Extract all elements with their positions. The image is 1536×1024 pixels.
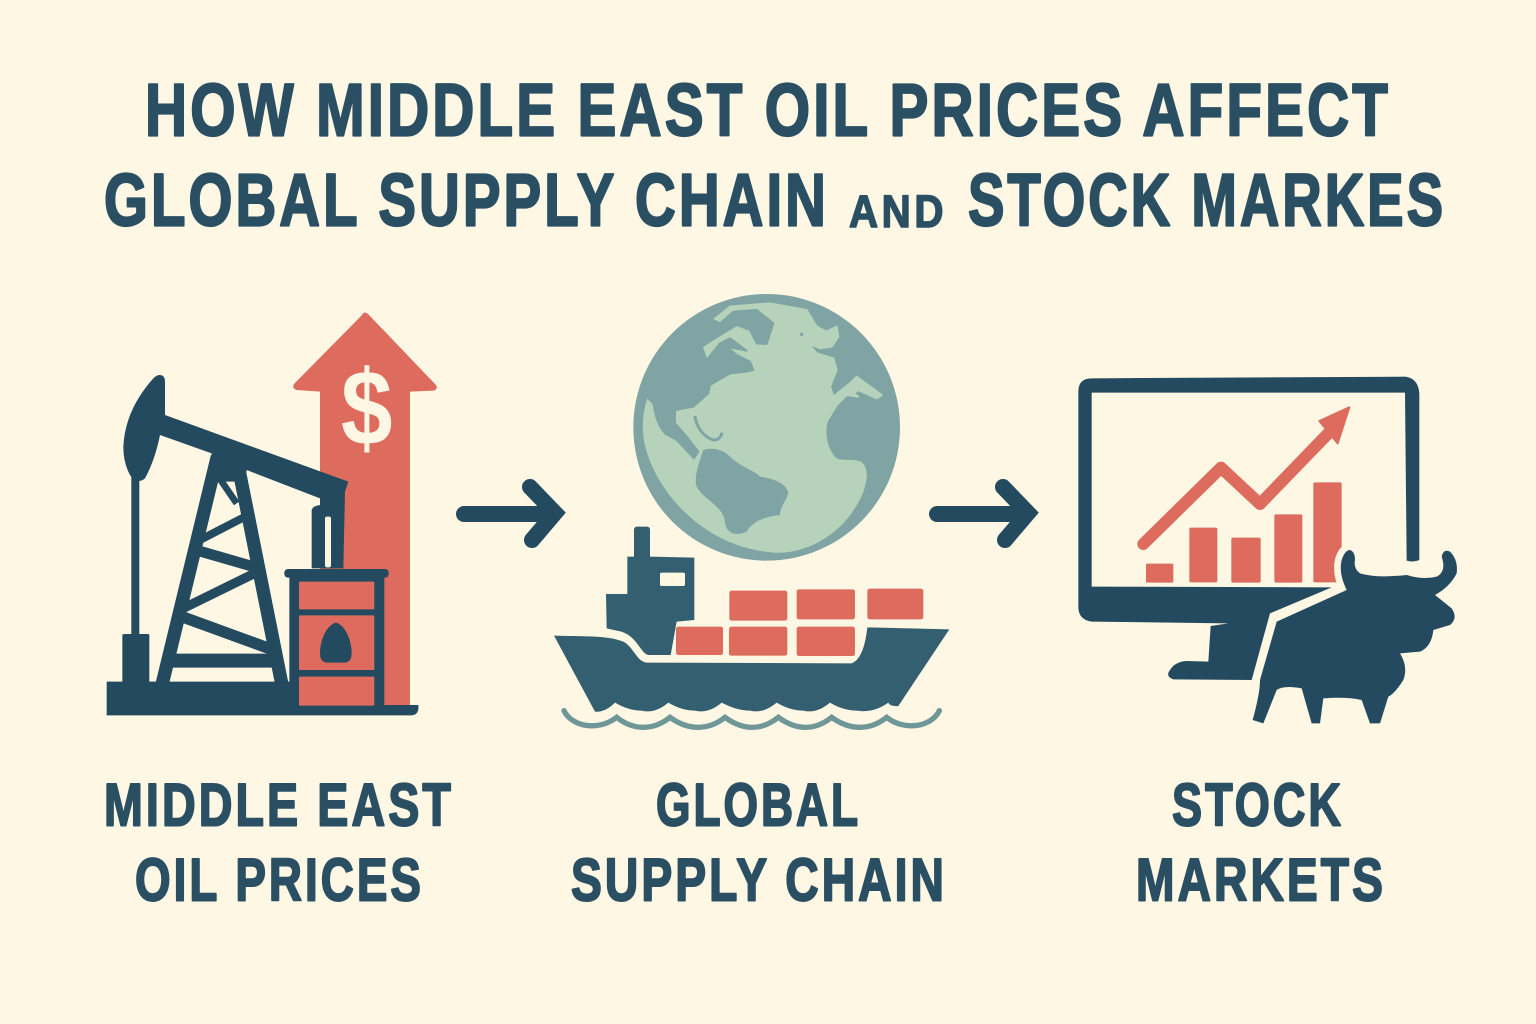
label: middle east oil prices: OIL PRICES bbox=[135, 846, 424, 914]
icon: pipe slot bbox=[325, 517, 331, 567]
panel: supply chain icon bbox=[554, 294, 949, 727]
label: stock markets: STOCK bbox=[1172, 772, 1344, 838]
label: global supply chain bbox=[571, 772, 947, 914]
icon: oil barrel bbox=[284, 569, 389, 707]
title bbox=[104, 68, 1446, 242]
panel: stock markets icon bbox=[1078, 377, 1457, 723]
title: GLOBAL SUPPLY CHAIN bbox=[104, 158, 829, 242]
label: global supply chain: SUPPLY CHAIN bbox=[571, 846, 947, 914]
label: middle east oil prices: MIDDLE EAST bbox=[104, 772, 454, 838]
icon: bull bbox=[1253, 550, 1457, 723]
icon: cargo ship bbox=[554, 527, 949, 712]
bar chart bbox=[1146, 482, 1342, 583]
icon: globe bbox=[633, 294, 900, 561]
icon: red up arrow with dollar sign bbox=[293, 313, 437, 708]
label: global supply chain: GLOBAL bbox=[656, 772, 861, 838]
icon: red up arrow with dollar sign: $ bbox=[341, 348, 392, 468]
icon: computer monitor bbox=[1078, 377, 1419, 680]
icon: water waves bbox=[564, 711, 939, 727]
title: AND bbox=[849, 186, 947, 237]
label: stock markets: MARKETS bbox=[1136, 846, 1386, 914]
icon: pumpjack bbox=[107, 375, 418, 715]
arrow: supply chain to stock markets bbox=[937, 487, 1028, 540]
trend arrow bbox=[1143, 407, 1349, 544]
panel: oil prices icon bbox=[107, 313, 437, 715]
label: middle east oil prices bbox=[104, 772, 454, 914]
arrow: oil to supply chain bbox=[464, 487, 555, 540]
label: stock markets bbox=[1136, 772, 1386, 914]
